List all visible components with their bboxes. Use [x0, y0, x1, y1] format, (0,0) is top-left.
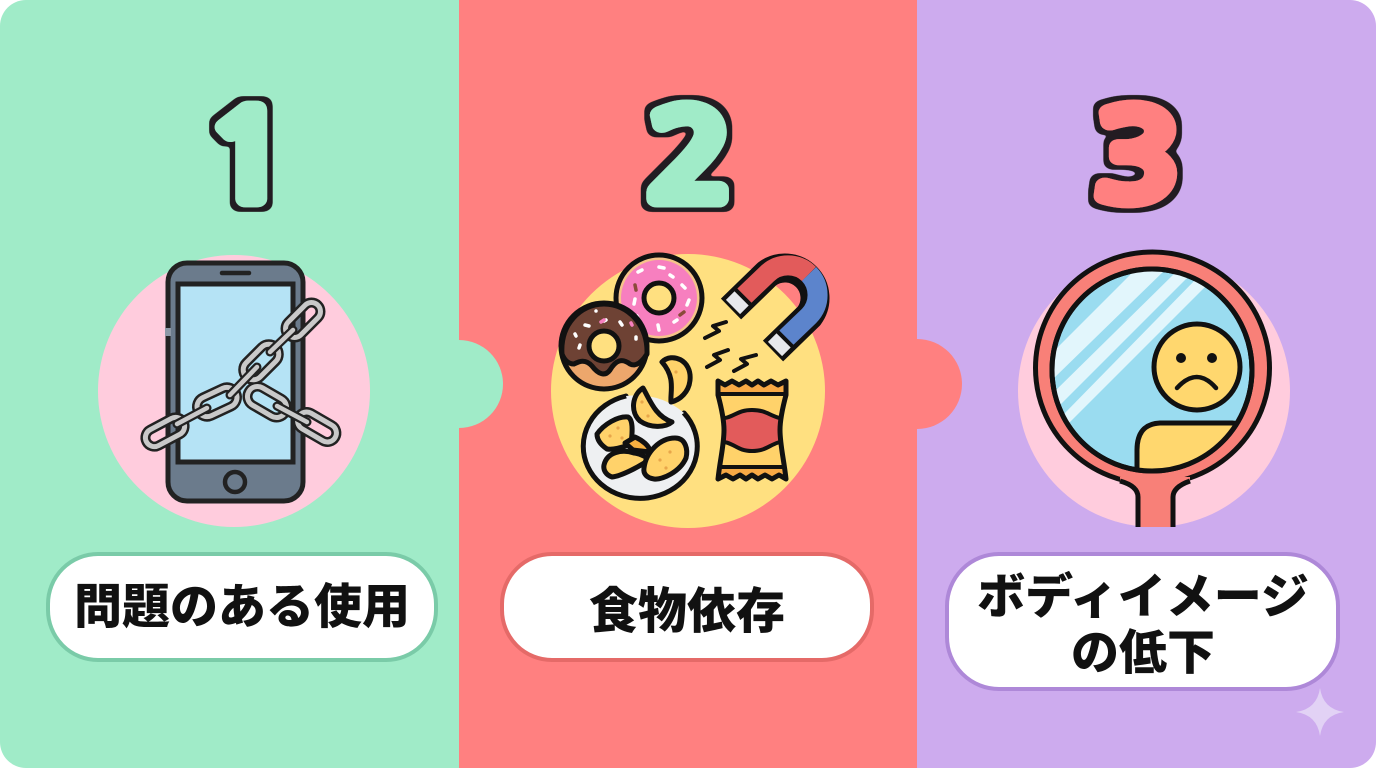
connector tab [459, 340, 503, 428]
connector tab [917, 339, 962, 429]
plate of chips [583, 358, 697, 498]
icon: sparkle [1296, 688, 1344, 736]
panel: body image (purple) [917, 0, 1376, 768]
number 3: 3 [1093, 98, 1181, 218]
label: food addiction: 食物依存 [589, 585, 785, 639]
icon: mirror with sad face [1018, 252, 1290, 527]
number 1: 1 [204, 98, 292, 218]
label: body image: ボディイメージ [977, 570, 1309, 624]
sparks [705, 322, 756, 371]
phone [165, 263, 303, 501]
icon: chained smartphone [98, 255, 370, 527]
number 2: 2 [646, 98, 734, 218]
panel: food addiction (red) [459, 0, 962, 768]
label: problematic use: 問題のある使用 [74, 581, 410, 634]
label: body image: の低下 [1071, 627, 1215, 680]
chocolate donut [561, 303, 647, 389]
chain [142, 299, 340, 450]
label: food addiction [502, 554, 872, 660]
panel: problematic use (green) [0, 0, 503, 768]
chip bag [716, 378, 788, 482]
magnet [731, 265, 818, 351]
label: problematic use [48, 554, 436, 660]
label: body image [947, 554, 1338, 689]
icon: junk food and magnet [551, 254, 825, 528]
pink donut [616, 255, 702, 341]
